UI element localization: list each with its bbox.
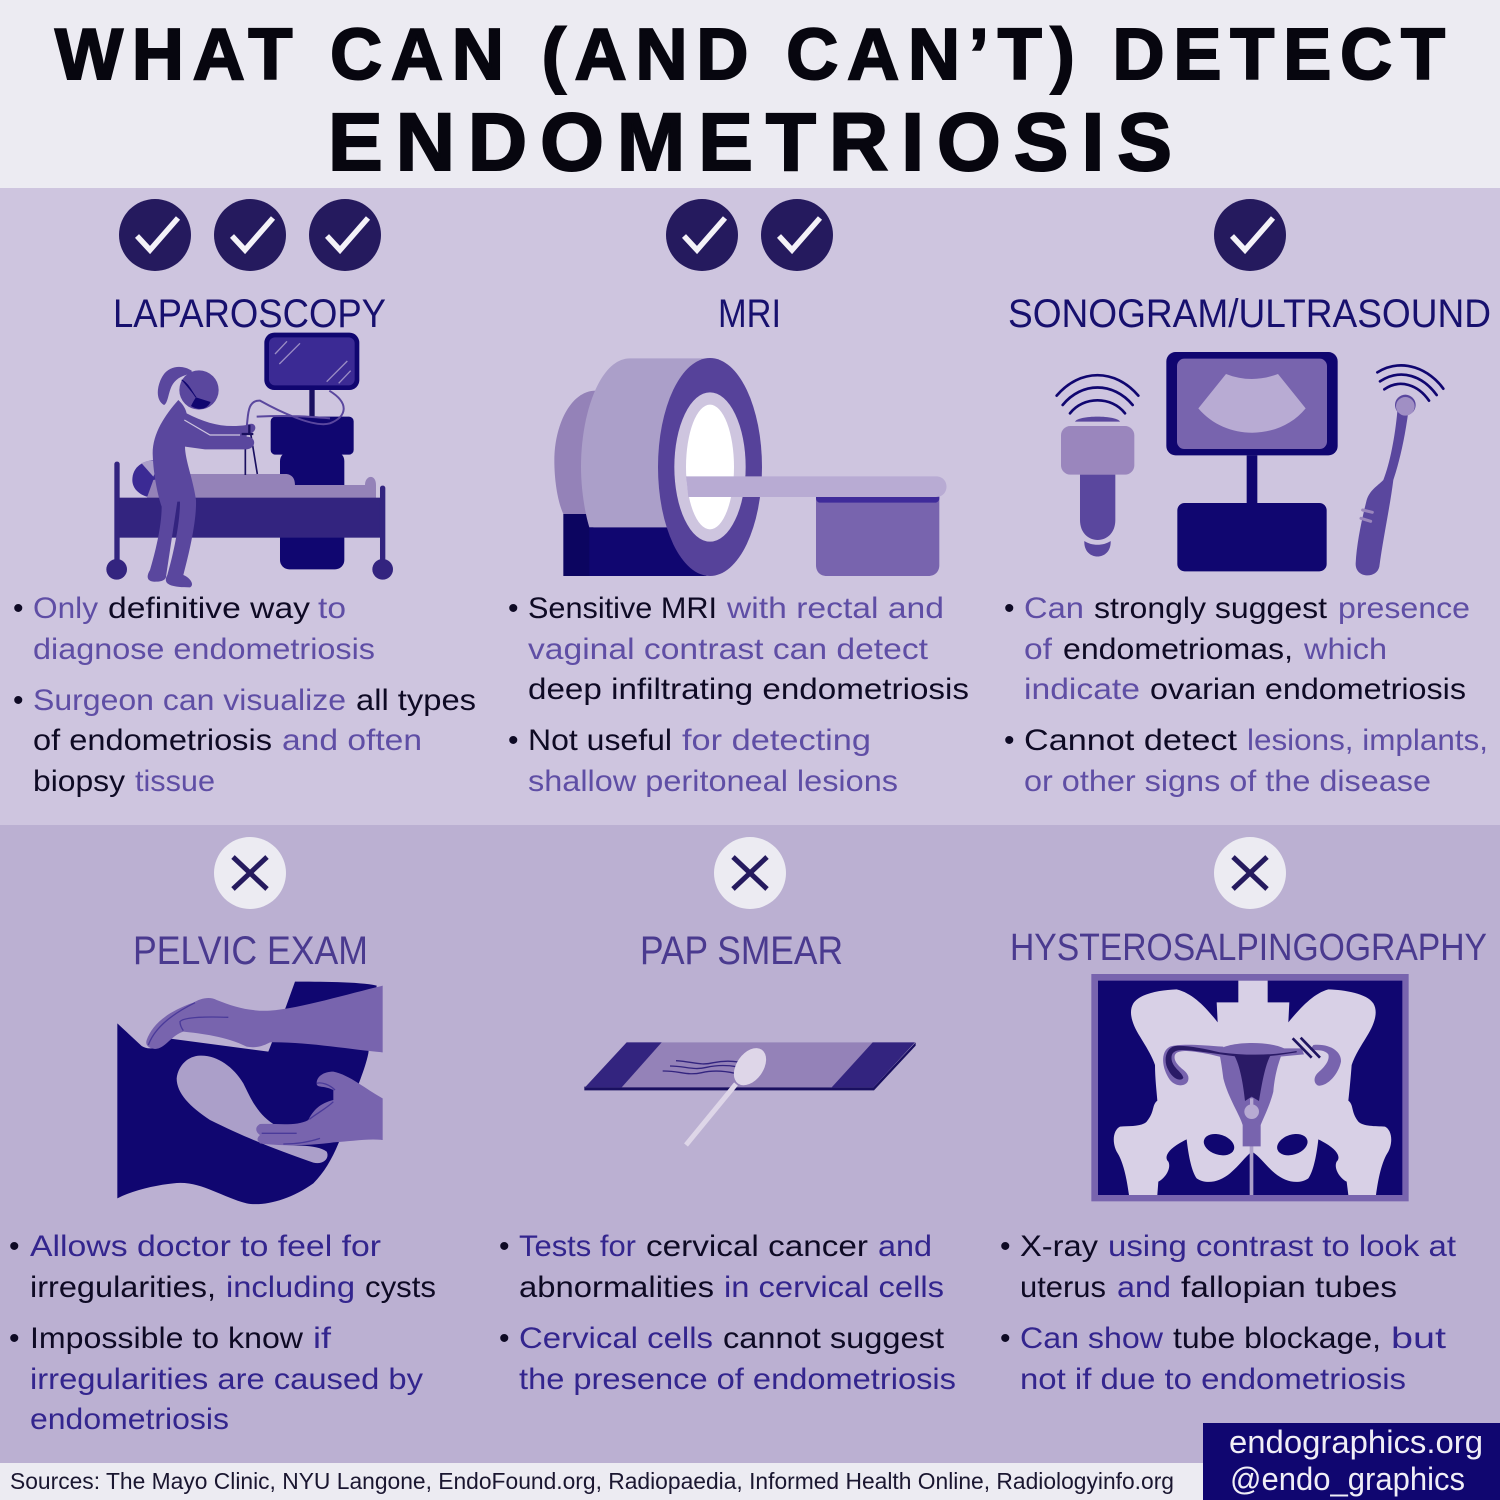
text block: MRI: • <box>508 724 519 757</box>
sources strip: Sources: The Mayo Clinic, NYU Langone, EndoFound.org, Radiopaedia, Informed Health Online, Radiologyinfo.org <box>10 1468 1174 1494</box>
text block: pap smear: and <box>878 1230 932 1263</box>
heading: pap smear: PAP SMEAR <box>640 929 843 973</box>
credit box: endographics.org <box>1229 1424 1483 1460</box>
text block: pelvic exam: irregularities are caused by <box>30 1363 423 1396</box>
illustration: pap smear slide <box>584 1042 916 1145</box>
illustration: MRI scanner <box>554 358 946 576</box>
text block: sonogram: indicate <box>1024 673 1140 706</box>
text block: sonogram: of <box>1024 633 1053 666</box>
text block: hysterosalpingography: fallopian tubes <box>1181 1271 1397 1304</box>
text block: hysterosalpingography: • <box>1000 1230 1011 1263</box>
credit box <box>1203 1423 1500 1500</box>
text block: laparoscopy: • <box>13 592 24 625</box>
icon: two checks <box>666 199 833 271</box>
header band <box>0 0 1500 188</box>
text block: pap smear: cervical cancer <box>646 1230 868 1263</box>
text block: hysterosalpingography: uterus <box>1020 1271 1106 1304</box>
text block: hysterosalpingography <box>1000 1230 1457 1396</box>
text block: sonogram: which <box>1303 633 1387 666</box>
text block: MRI: with rectal and <box>726 592 944 625</box>
text block: pelvic exam: • <box>9 1230 20 1263</box>
text block: sonogram: • <box>1004 592 1015 625</box>
text block: hysterosalpingography: not if due to endometriosis <box>1020 1363 1406 1396</box>
text block: sonogram: lesions, implants, <box>1247 724 1488 757</box>
text block: hysterosalpingography: and <box>1117 1271 1171 1304</box>
text block: laparoscopy: all types <box>356 684 476 717</box>
text block: laparoscopy: tissue <box>135 765 215 798</box>
text block: pelvic exam: Allows doctor to feel for <box>30 1230 381 1263</box>
title: WHAT CAN (AND CAN’T) DETECT <box>55 15 1445 95</box>
icon: cross two <box>714 837 786 909</box>
credit box: @endo_graphics <box>1230 1461 1465 1497</box>
text block: MRI: for detecting <box>682 724 871 757</box>
panel: tests that cannot detect <box>0 825 1500 1463</box>
illustration: laparoscopy <box>106 333 393 587</box>
text block: pelvic exam: endometriosis <box>30 1403 229 1436</box>
text block: sonogram: strongly suggest <box>1094 592 1328 625</box>
text block: laparoscopy: Surgeon can visualize <box>33 684 346 717</box>
text block: MRI: Not useful <box>528 724 672 757</box>
text block: sonogram: presence <box>1338 592 1470 625</box>
text block: laparoscopy <box>13 592 476 798</box>
text block: sonogram: • <box>1004 724 1015 757</box>
text block: pap smear: • <box>499 1322 510 1355</box>
text block: pap smear: in cervical cells <box>724 1271 944 1304</box>
text block: sonogram: or other signs of the disease <box>1024 765 1431 798</box>
text block: pelvic exam: cysts <box>365 1271 436 1304</box>
text block: hysterosalpingography: Can show <box>1020 1322 1163 1355</box>
text block: MRI: Sensitive MRI <box>528 592 717 625</box>
title <box>55 15 1445 188</box>
text block: pelvic exam: Impossible to know <box>30 1322 303 1355</box>
text block: hysterosalpingography: X-ray <box>1020 1230 1098 1263</box>
text block: pap smear: Cervical cells <box>519 1322 713 1355</box>
text block: pelvic exam: • <box>9 1322 20 1355</box>
icon: cross three <box>1214 837 1286 909</box>
text block: sonogram: Cannot detect <box>1024 724 1238 757</box>
text block: pap smear: abnormalities <box>519 1271 714 1304</box>
text block: laparoscopy: definitive way <box>108 592 310 625</box>
text block: hysterosalpingography: tube blockage, <box>1173 1322 1381 1355</box>
text block: pap smear: cannot suggest <box>723 1322 945 1355</box>
heading: MRI: MRI <box>718 292 781 336</box>
illustration: ultrasound machine and probes <box>1057 352 1443 575</box>
text block: MRI: • <box>508 592 519 625</box>
icon: three checks <box>119 199 381 271</box>
text block: pelvic exam: irregularities, <box>30 1271 216 1304</box>
text block: pelvic exam <box>9 1230 436 1436</box>
illustration: hysterosalpingography x-ray <box>1091 974 1409 1201</box>
icon: cross one <box>214 837 286 909</box>
text block: pelvic exam: including <box>226 1271 355 1304</box>
text block: laparoscopy: of endometriosis <box>33 724 272 757</box>
text block: hysterosalpingography: • <box>1000 1322 1011 1355</box>
text block: pap smear: Tests for <box>519 1230 636 1263</box>
text block: sonogram <box>1004 592 1488 798</box>
text block: MRI <box>508 592 969 798</box>
text block: MRI: deep infiltrating endometriosis <box>528 673 969 706</box>
text block: laparoscopy: Only <box>33 592 98 625</box>
text block: MRI: vaginal contrast can detect <box>528 633 929 666</box>
text block: pelvic exam: if <box>313 1322 332 1355</box>
text block: hysterosalpingography: but <box>1391 1322 1447 1355</box>
text block: hysterosalpingography: using contrast to look at <box>1108 1230 1457 1263</box>
text block: pap smear <box>499 1230 956 1396</box>
panel: tests that can detect <box>0 188 1500 825</box>
text block: laparoscopy: biopsy <box>33 765 125 798</box>
text block: sonogram: Can <box>1024 592 1084 625</box>
title: ENDOMETRIOSIS <box>328 97 1172 188</box>
text block: sonogram: ovarian endometriosis <box>1150 673 1466 706</box>
lower row of tests <box>9 837 1487 1436</box>
upper row of tests <box>13 199 1491 798</box>
text block: laparoscopy: • <box>13 684 24 717</box>
text block: laparoscopy: diagnose endometriosis <box>33 633 375 666</box>
text block: pap smear: the presence of endometriosis <box>519 1363 956 1396</box>
heading: pelvic exam: PELVIC EXAM <box>133 929 368 973</box>
text block: laparoscopy: to <box>318 592 346 625</box>
text block: laparoscopy: and often <box>282 724 422 757</box>
icon: one check <box>1214 199 1286 271</box>
heading: laparoscopy: LAPAROSCOPY <box>113 292 386 336</box>
text block: pap smear: • <box>499 1230 510 1263</box>
text block: MRI: shallow peritoneal lesions <box>528 765 898 798</box>
sources strip <box>0 1463 1203 1500</box>
text block: sonogram: endometriomas, <box>1063 633 1293 666</box>
illustration: pelvic exam <box>117 982 383 1204</box>
